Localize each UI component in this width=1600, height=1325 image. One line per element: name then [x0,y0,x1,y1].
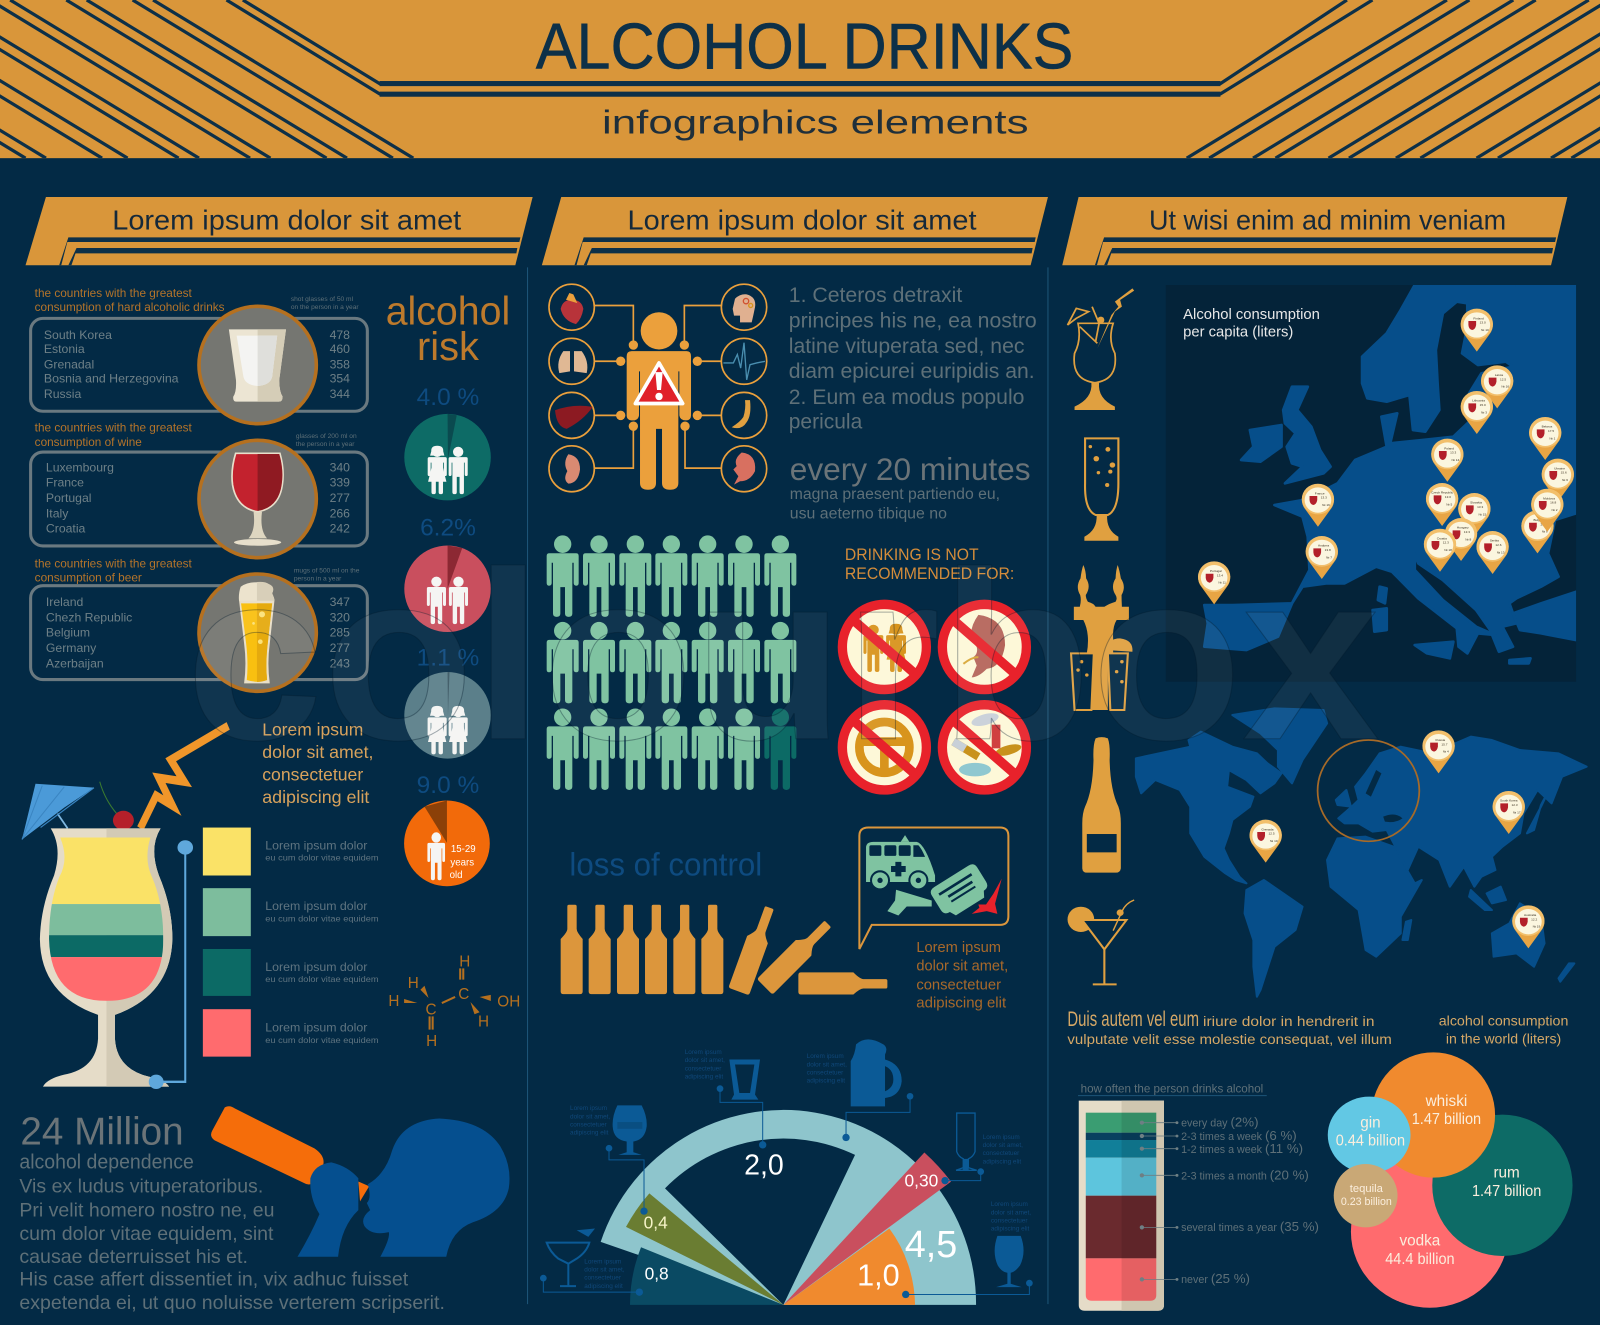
icon: champagne flute [1084,438,1118,541]
table: wine: glasses of 200 ml on [296,433,357,440]
icon: beer glass [239,582,275,683]
heading: alcohol risk [386,289,510,369]
chart captions: consectetuer [807,1069,844,1076]
table: wine: 266 [330,506,350,520]
icon: ambulance [866,835,935,889]
callout text: loss of control: dolor sit amet, [916,958,1008,974]
icon: wine glass [232,453,283,546]
map pins: Europe: 12.3 [1443,541,1449,545]
heading: world consumption: alcohol consumption [1439,1014,1568,1030]
icon: head with gears [733,294,755,322]
falling bottles [561,904,887,995]
icon: ECG trace [723,343,765,380]
chart captions: consectetuer [570,1122,608,1129]
icon: stomach [732,400,750,428]
icon: lungs [558,351,587,373]
ethanol formula [388,953,520,1050]
map pins: Europe [1198,309,1574,604]
chart captions: dolor sit amet, [983,1142,1023,1149]
map pins: world: № 19 [1533,925,1541,929]
bubble chart: world consumption: gin [1360,1115,1381,1132]
map pins: Europe: 13.0 [1480,321,1486,325]
map pins: Europe: № 7 [1326,555,1332,559]
stacked glass: drinking frequency: 1-2 times a week (11 %) [1181,1141,1303,1156]
icon: liver [555,406,593,429]
map pins: Europe: Finland [1473,316,1484,320]
map pins: Europe: 12.6 [1495,543,1502,547]
heading: drinking not recommended [845,546,1014,583]
map: world [1136,708,1587,997]
map pins: world: 15.7 [1441,742,1448,746]
map pins: Europe: 13.3 [1464,530,1470,534]
section banner: column three: Ut wisi enim ad minim veniam [1149,205,1506,236]
text block: 24 million: cum dolor vitae equidem, sint [19,1223,274,1245]
callout text: loss of control: adipiscing elit [916,996,1006,1012]
callout text: loss of control [916,940,1008,1012]
text block: Duis autem: vulputate velit esse molestie consequat, vel illum [1067,1032,1392,1048]
header banner [0,0,1600,158]
bubble chart: world consumption: whiski [1425,1093,1467,1110]
icon: kidney [565,454,580,484]
map pins: Europe: № 14 [1452,458,1460,462]
table: hard alcoholic drinks: shot glasses of 50 ml [291,296,354,303]
legend: cocktail layers: eu cum dolor vitae equidem [265,974,379,984]
ethanol formula: H [478,1014,489,1031]
text block: 24 million: causae deterruisset his et. [19,1246,248,1268]
section banner: column two [542,197,1048,265]
table: hard alcoholic drinks: 354 [330,372,350,386]
map pins: Europe: Lithuania [1472,399,1485,403]
pie: 9.0 percent: old [450,870,463,881]
map pins: Europe: Hungary [1457,526,1469,530]
map pins: Europe: Latvia [1495,373,1503,377]
text block: 24 million: 24 Million [20,1110,184,1153]
bubble chart: world consumption: 1.47 billion [1472,1183,1541,1200]
table: hard alcoholic drinks: the countries with the greatest [35,287,193,300]
stacked glass: drinking frequency: 2-3 times a week (6 %) [1181,1128,1297,1143]
icon: crashed car [929,862,993,921]
heading: loss of control: loss of control [569,846,762,883]
pie: 9.0 percent: years [450,857,474,868]
table: wine: 340 [330,460,350,474]
callout text: Lorem ipsum [262,720,363,740]
cocktail glass [22,726,228,1089]
chart captions: consectetuer [584,1275,622,1282]
inland seas [1366,770,1402,822]
section banner: column two: Lorem ipsum dolor sit amet [628,205,977,236]
map pins: Europe: № 18 [1444,548,1452,552]
icon: warning triangle [635,363,683,404]
map pins: Europe: Ukraine [1554,466,1565,470]
map pins: Europe: № 16 [1322,503,1330,507]
icon: champagne bottle [1082,737,1121,873]
map pins: world: № 17 [1513,810,1521,814]
table: hard alcoholic drinks: on the person in a year [291,304,359,311]
icon: martini [1068,900,1134,984]
pie: 1.1 percent: 1.1 % [417,644,479,671]
text block: every 20 minutes: usu aeterno tibique no [790,505,947,522]
chart captions: dolor sit amet, [570,1113,610,1120]
chart captions: Lorem ipsum [570,1105,607,1112]
text block: every 20 minutes [790,451,1031,522]
icon: cocktail outline [1068,288,1134,410]
chart captions: consectetuer [685,1065,722,1072]
table: beer: the countries with the greatest [35,557,193,570]
ethanol formula: H [459,953,470,970]
stacked glass: drinking frequency: every day (2%) [1181,1115,1258,1130]
table: beer: 285 [330,626,350,640]
map title: Alcohol consumption [1183,307,1320,323]
table: beer: Ireland [46,595,84,609]
icon: no driving [842,705,926,790]
table: hard alcoholic drinks: Russia [44,387,81,401]
stacked glass: drinking frequency: never (25 %) [1181,1271,1250,1286]
stacked glass: drinking frequency: how often the person drinks alcohol [1081,1082,1263,1095]
text block: numbered notes: 2. Eum ea modus populo [789,385,1024,409]
bubble chart: world consumption: 1.47 billion [1412,1111,1481,1128]
chart captions: adipiscing elit [685,1074,723,1081]
legend: cocktail layers: Lorem ipsum dolor [265,900,367,913]
section banner: column one [26,197,533,265]
map pins: Europe: 15.6 [1561,471,1567,475]
table: beer: mugs of 500 ml on the [294,567,360,574]
map pins: Europe: Bulgaria [1533,518,1545,522]
map pins: Europe: France [1315,491,1325,495]
text block: Duis autem: Duis autem vel eum [1067,1007,1199,1031]
map pins: Europe: 13.8 [1325,548,1331,552]
table: beer [31,557,367,691]
stacked glass: drinking frequency: several times a year (35 %) [1181,1219,1319,1234]
chart captions: Lorem ipsum [685,1049,722,1056]
table: beer: 320 [330,610,350,624]
icon: margarita [547,1229,595,1286]
text block: numbered notes: diam epicurei euripidis an. [789,359,1035,383]
callout text: loss of control: Lorem ipsum [916,940,1001,956]
table: hard alcoholic drinks: consumption of hard alcoholic drinks [35,301,225,314]
legend: cocktail layers [203,828,379,1057]
table: beer: Germany [46,641,97,655]
table: wine: Italy [46,506,69,520]
table: beer: Belgium [46,626,90,640]
callout text: loss of control: consectetuer [916,977,1001,993]
watermark: colourbox [186,522,1380,790]
icon: person drinking from a bottle [211,1106,510,1257]
map pins: Europe: № 3 [1481,410,1487,414]
heading: alcohol risk: alcohol [386,289,510,333]
text block: 24 million: alcohol dependence [19,1151,194,1173]
bubble chart: world consumption: 0.44 billion [1336,1132,1405,1149]
chart captions: Lorem ipsum [983,1134,1020,1141]
chart captions: dolor sit amet, [807,1061,847,1068]
ethanol formula: OH [497,994,520,1011]
callout text: dolor sit amet, [262,742,373,762]
callout text [262,720,373,807]
map pins: Europe: Portugal [1210,569,1222,573]
map pins: Europe: № 5 [1446,502,1453,506]
map pins: world: Australia [1524,913,1537,917]
map pins: Europe: № 6 [1562,478,1568,482]
map pins: Europe: 13.3 [1477,505,1484,509]
icon: heart [561,293,583,324]
table: wine: Portugal [46,491,91,505]
chart values: 1,0 [857,1259,900,1293]
section banner: column one: Lorem ipsum dolor sit amet [112,205,462,236]
map pins: Europe: № 9 [1542,530,1548,534]
bubble chart: world consumption: vodka [1399,1232,1441,1249]
map pins: Europe: № 10 [1481,328,1489,332]
pie: 4.0 percent [404,384,491,500]
text block: Duis autem [1067,1007,1392,1048]
pie: 6.2 percent: 6.2% [420,515,476,542]
chart captions: adipiscing elit [570,1130,609,1137]
chart captions: adipiscing elit [584,1283,623,1290]
map pins: Europe: Slovakia [1470,501,1482,505]
text block: numbered notes: latine vituperata sed, nec [789,334,1025,358]
map title: per capita (liters) [1183,325,1293,341]
heading: world consumption [1439,1014,1568,1047]
chart captions: Lorem ipsum [807,1053,844,1060]
chart captions: adipiscing elit [991,1226,1029,1233]
icon: wine glass [995,1236,1024,1287]
table: hard alcoholic drinks: 358 [330,357,350,371]
icon: beer mug [851,1039,902,1106]
map pins: Europe: Poland [1444,446,1454,450]
chart values: 2,0 [744,1149,784,1181]
map pins: world: 12.3 [1512,803,1518,807]
heading: world consumption: in the world (liters) [1446,1031,1561,1047]
heading: alcohol risk: risk [417,325,479,369]
icon: no medication [942,705,1026,790]
table: hard alcoholic drinks: Estonia [44,342,85,356]
text block: 24 million: expetenda ei, ut quo noluisse verterem scripserit. [19,1292,445,1314]
speech bubble with accident icons [859,827,1008,949]
table: hard alcoholic drinks: Grenadal [44,357,94,371]
map pins: world: № 4 [1443,750,1449,754]
chart captions: adipiscing elit [983,1158,1021,1165]
chart captions: Lorem ipsum [584,1258,621,1265]
map pins: Europe: № 11 [1218,581,1226,585]
table: hard alcoholic drinks: Bosnia and Herzegovina [44,372,179,386]
text block: numbered notes [789,283,1037,434]
map pins: Europe: 16.8 [1550,501,1557,505]
icon: no pregnancy [942,604,1026,690]
ethanol formula: C [425,1001,437,1018]
table: wine: the person in a year [296,441,355,448]
map pins: Europe: 13.3 [1321,496,1327,500]
text block: 24 million: Pri velit homero nostro ne, eu [19,1199,274,1221]
icon: brandy glass [613,1105,647,1155]
map pins: Europe: Belarus [1542,425,1553,429]
table: wine: 277 [330,491,350,505]
chart captions: dolor sit amet, [991,1209,1031,1216]
text block: 24 million [19,1110,445,1314]
chart values: 4,5 [905,1223,957,1265]
text block: 24 million: His case affert dissentiet in, vix adhuc fuisset [19,1269,409,1291]
map pins: Europe: 13.7 [1540,522,1547,526]
stacked glass: drinking frequency [1078,1082,1319,1311]
icon: champagne flute [956,1113,977,1170]
map pins: Europe: 13.3 [1450,451,1457,455]
icon: shot glass [729,1059,760,1100]
table: hard alcoholic drinks: 478 [330,328,350,342]
ethanol formula: H [388,993,399,1010]
ethanol formula: C [458,986,469,1003]
chart captions: adipiscing elit [807,1078,845,1085]
table: wine: France [46,476,84,490]
stacked glass: drinking frequency: 2-3 times a month (20 %) [1181,1168,1309,1183]
bubble chart: world consumption: rum [1493,1165,1520,1182]
table: wine: 242 [330,522,350,536]
callout text: adipiscing elit [262,787,370,807]
heading: drinking not recommended: RECOMMENDED FOR: [845,565,1014,583]
chart captions: consectetuer [983,1150,1020,1157]
chart values: 0,4 [644,1213,668,1233]
map pins: world [1250,730,1545,948]
table: beer: consumption of beer [35,572,142,585]
text block: every 20 minutes: every 20 minutes [790,451,1031,487]
table: wine [31,422,367,558]
pie: 6.2 percent [404,515,491,632]
bubble chart: world consumption: tequila [1350,1183,1384,1195]
map pins: Europe: 13.4 [1217,573,1223,577]
chart captions [570,1049,1031,1290]
table: hard alcoholic drinks: 460 [330,342,350,356]
icon: no children [842,604,926,690]
pie: 4.0 percent: 4.0 % [417,384,479,411]
text block: Duis autem: iriure dolor in hendrerit in [1203,1014,1374,1030]
map pins: Europe: № 16 [1501,385,1509,389]
table: beer: Chezh Republic [46,610,132,624]
icon: shot glass [229,329,286,402]
map pins: Europe: Croatia [1437,536,1447,540]
radial chart of drink amounts [540,1039,1033,1305]
bubble chart: world consumption: 44.4 billion [1385,1251,1455,1268]
table: wine: Croatia [46,522,86,536]
legend: cocktail layers: eu cum dolor vitae equidem [265,913,379,923]
map pins: Europe: 15.0 [1480,403,1486,407]
bottle and martini icons [1068,737,1134,984]
map title [1183,307,1320,341]
callout text: consectetuer [262,765,363,785]
icon: explosion [972,879,1002,914]
map pins: world: South Korea [1500,799,1518,803]
chart captions: consectetuer [991,1217,1028,1224]
table: wine: Luxembourg [46,460,114,474]
pie: 9.0 percent: 15-29 [451,844,476,855]
map pins: Europe: 13.0 [1445,495,1451,499]
map pins: Europe: Andorra [1318,544,1329,548]
text block: numbered notes: principes his ne, ea nostro [789,309,1037,333]
table: wine: consumption of wine [35,436,142,449]
chart values [644,1149,957,1293]
title: ALCOHOL DRINKS [536,9,1073,82]
icon: umbrella [22,784,94,840]
text block: 24 million: Vis ex ludus vituperatoribus. [19,1175,263,1197]
map pins: Europe: Czech Republic [1431,491,1454,495]
map pins: world: Grenada [1261,827,1274,831]
map pins: Europe: № 1 [1549,436,1556,440]
map pins: world: 12.2 [1531,917,1538,921]
section banner: column three [1062,197,1567,265]
map pins: Europe: № 2 [1552,508,1558,512]
map pins: world: Russia [1436,738,1445,742]
chart values: 0,8 [645,1264,669,1284]
body diagram with organ icons [549,284,767,492]
ethanol formula: H [426,1033,437,1050]
pie: 9.0 percent: 9.0 % [417,772,479,799]
map pins: Europe: 17.5 [1548,429,1554,433]
ethanol formula: H [408,975,419,992]
map pins: Europe: 12.5 [1500,377,1506,381]
chart captions: dolor sit amet, [685,1057,725,1064]
heading: drinking not recommended: DRINKING IS NOT [845,546,979,564]
legend: cocktail layers: eu cum dolor vitae equidem [265,1035,379,1045]
table: wine: the countries with the greatest [35,422,193,435]
bubble chart: world consumption [1328,1052,1573,1308]
table: hard alcoholic drinks [31,287,367,424]
chart values: 0,30 [905,1171,938,1191]
drink glass icons column [1068,288,1134,710]
map pins: world: № 10 [1270,839,1278,843]
text block: numbered notes: 1. Ceteros detraxit [789,283,962,307]
legend: cocktail layers: eu cum dolor vitae equidem [265,853,379,863]
pie: 1.1 percent [404,644,491,759]
legend: cocktail layers: Lorem ipsum dolor [265,1022,367,1035]
table: beer: person in a year [294,576,342,583]
map pins: Europe: Serbia [1490,539,1499,543]
map pins: world: 12.5 [1268,832,1275,836]
table: hard alcoholic drinks: 344 [330,387,350,401]
pictogram: people grid [547,535,796,790]
chart captions: Lorem ipsum [991,1201,1028,1208]
icon: beer taps [1071,565,1132,710]
map pins: Europe: № 15 [1479,512,1487,516]
bubble chart: world consumption: 0.23 billion [1341,1196,1392,1208]
legend: cocktail layers: Lorem ipsum dolor [265,839,367,852]
chart captions: dolor sit amet, [584,1266,625,1273]
text block: every 20 minutes: magna praesent partiendo eu, [790,486,1000,503]
map pins: Europe: № 8 [1465,537,1472,541]
table: beer: Azerbaijan [46,656,104,670]
table: beer: 243 [330,656,350,670]
table: beer: 347 [330,595,350,609]
icon: fetus [733,453,755,485]
map: Europe alcohol consumption [1166,285,1576,682]
pie: 9.0 percent [404,772,490,886]
table: hard alcoholic drinks: South Korea [44,328,112,342]
text block: numbered notes: pericula [789,410,862,434]
table: wine: 339 [330,476,350,490]
icon: pistol [887,890,932,916]
table: beer: 277 [330,641,350,655]
prohibition icons [842,604,1026,790]
map pins: Europe: № 13 [1497,550,1505,554]
map pins: Europe: Moldova [1543,496,1555,500]
subtitle: infographics elements [602,105,1029,142]
legend: cocktail layers: Lorem ipsum dolor [265,961,367,974]
